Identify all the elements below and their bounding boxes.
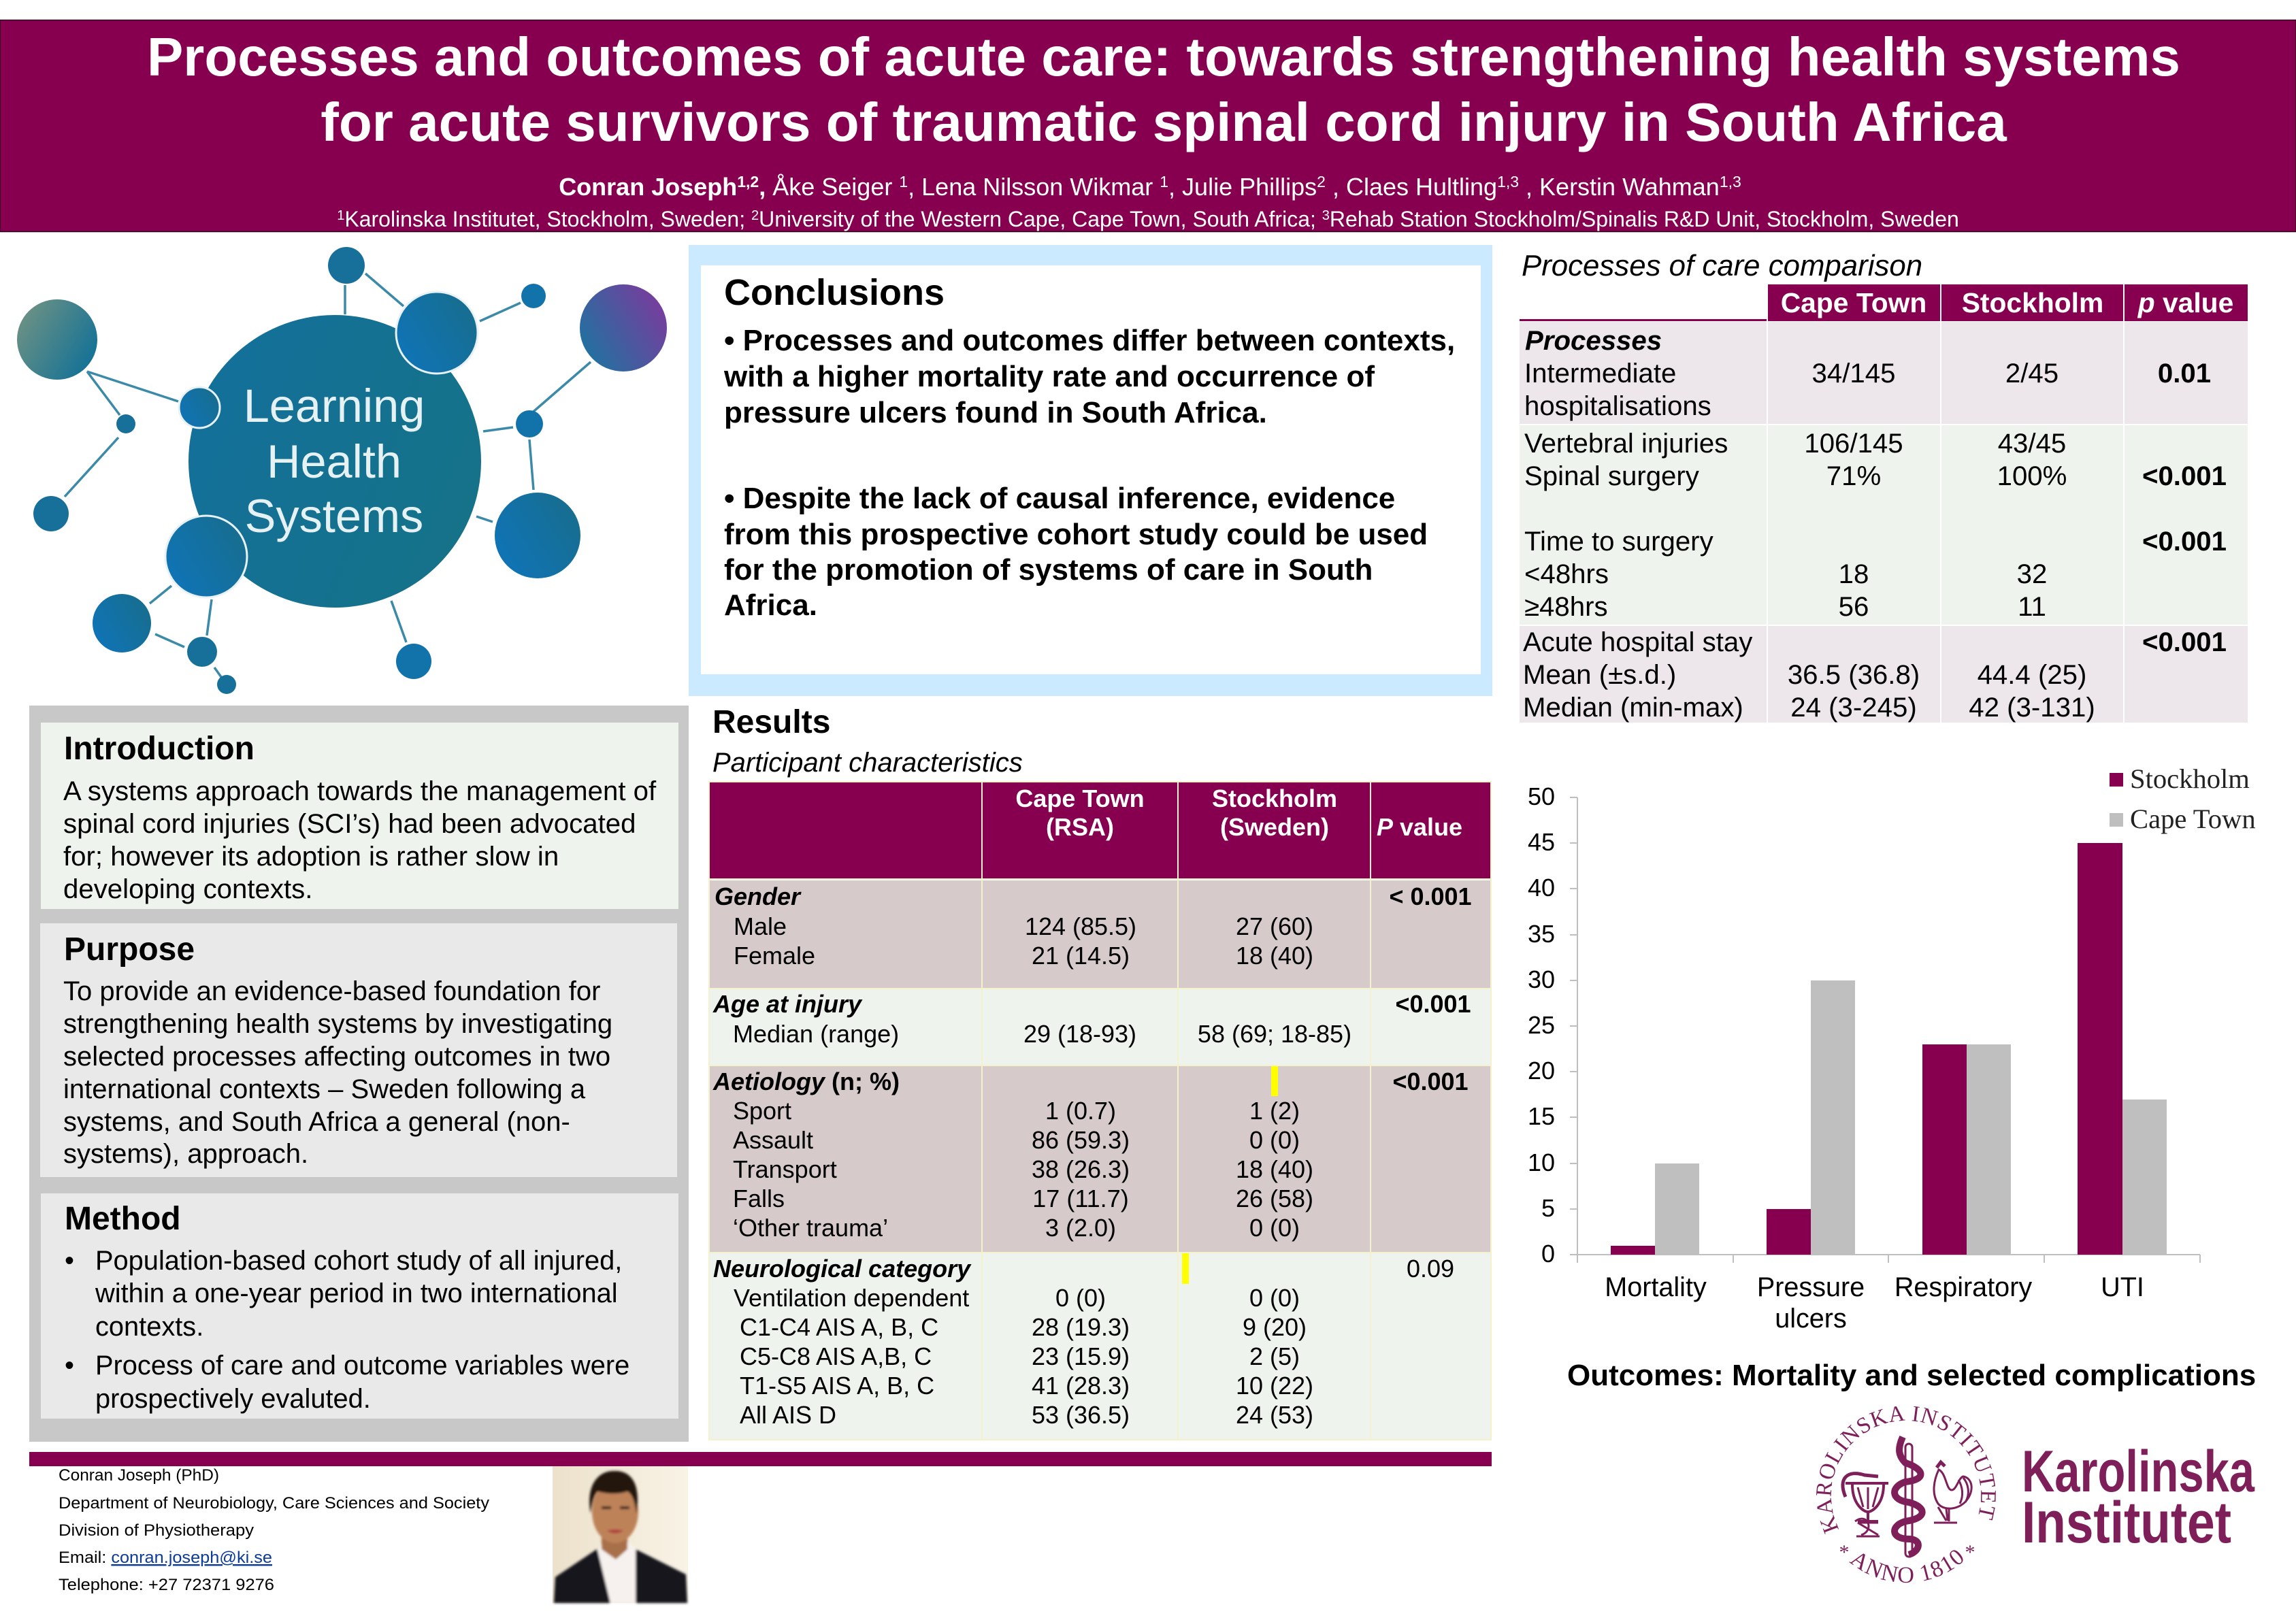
conclusions text: with a higher mortality rate and occurrence of bbox=[723, 360, 1375, 393]
panel: purpose: international contexts – Sweden following a bbox=[63, 1074, 586, 1104]
panel: purpose: systems, and South Africa a general (non- bbox=[63, 1107, 570, 1137]
conclusions text: • Despite the lack of causal inference, evidence bbox=[724, 482, 1395, 515]
surgery rows: 71% bbox=[1826, 461, 1881, 491]
table: processes of care bbox=[1520, 284, 2248, 723]
aetiology rows: Assault bbox=[733, 1126, 813, 1154]
y-axis labels: 35 bbox=[1528, 920, 1555, 948]
panel: introduction: A systems approach towards the management of bbox=[63, 776, 657, 806]
panel: introduction: developing contexts. bbox=[63, 874, 312, 904]
bars: UTI bbox=[2078, 843, 2167, 1255]
seal: KAROLINSKA INSTITUTET bbox=[1816, 1406, 1996, 1534]
panel: introduction: spinal cord injuries (SCI’s) had been advocated bbox=[63, 808, 636, 839]
authors: 1,3 bbox=[1497, 173, 1519, 191]
title bbox=[147, 27, 2180, 152]
panel: method bbox=[41, 1193, 678, 1419]
aetiology rows: 26 (58) bbox=[1236, 1185, 1313, 1212]
conclusions text: pressure ulcers found in South Africa. bbox=[724, 396, 1267, 429]
panel: purpose bbox=[40, 923, 677, 1177]
panel: introduction: Introduction bbox=[64, 731, 255, 767]
aetiology rows: 38 (26.3) bbox=[1032, 1155, 1130, 1183]
affiliations: Karolinska Institutet, Stockholm, Sweden; bbox=[344, 207, 751, 231]
y-axis labels: 45 bbox=[1528, 828, 1555, 856]
surgery rows: 56 bbox=[1839, 591, 1869, 622]
processes rows bbox=[1524, 325, 2211, 421]
table header bbox=[1015, 784, 1462, 841]
surgery rows: <48hrs bbox=[1524, 559, 1609, 589]
neurological rows: 53 (36.5) bbox=[1032, 1401, 1130, 1429]
surgery rows: Time to surgery bbox=[1524, 526, 1714, 557]
hospital stay rows: 36.5 (36.8) bbox=[1788, 659, 1920, 690]
aetiology rows: 1 (2) bbox=[1249, 1097, 1300, 1125]
panel: method: • bbox=[65, 1351, 74, 1381]
table header: Cape Town bbox=[1781, 287, 1926, 318]
panel: purpose: strengthening health systems by investigating bbox=[63, 1009, 612, 1039]
neurological rows bbox=[713, 1255, 1454, 1429]
panel: conclusions bbox=[689, 245, 1492, 696]
footer bar bbox=[29, 1452, 1492, 1466]
category labels: Mortality bbox=[1605, 1272, 1707, 1302]
bars: respiratory bbox=[1922, 1044, 2011, 1255]
y-axis labels: 20 bbox=[1528, 1057, 1555, 1085]
age rows: <0.001 bbox=[1395, 990, 1471, 1018]
surgery rows: 100% bbox=[1997, 461, 2067, 491]
y-axis labels: 10 bbox=[1528, 1148, 1555, 1176]
age rows: 58 (69; 18-85) bbox=[1198, 1020, 1351, 1048]
chart axes bbox=[1570, 797, 2200, 1263]
surgery rows: 106/145 bbox=[1804, 428, 1903, 459]
neurological rows: C5-C8 AIS A,B, C bbox=[740, 1342, 932, 1370]
gender rows: Gender bbox=[715, 882, 802, 910]
hospital stay rows: 42 (3-131) bbox=[1969, 692, 2095, 723]
surgery rows: 11 bbox=[2018, 591, 2046, 622]
conclusions text: from this prospective cohort study could be used bbox=[724, 518, 1428, 551]
table header: Stockholm bbox=[1962, 287, 2103, 318]
panel: purpose: Purpose bbox=[64, 931, 195, 968]
panel: method: prospectively evaluted. bbox=[95, 1384, 371, 1414]
chart title: Outcomes: Mortality and selected complications bbox=[1567, 1359, 2256, 1392]
big circle bbox=[188, 315, 481, 608]
panel: method: contexts. bbox=[95, 1312, 203, 1342]
panel: purpose: systems), approach. bbox=[63, 1139, 308, 1169]
aetiology rows: 1 (0.7) bbox=[1045, 1097, 1116, 1125]
gender rows: 18 (40) bbox=[1236, 942, 1313, 970]
authors: 2 bbox=[1317, 173, 1326, 191]
seal: * bbox=[1965, 1541, 1975, 1564]
surgery rows: <0.001 bbox=[2142, 461, 2227, 491]
aetiology rows: Transport bbox=[733, 1155, 837, 1183]
conclusions text: Africa. bbox=[724, 589, 817, 622]
authors: , Julie Phillips bbox=[1168, 173, 1317, 201]
legend: Cape Town bbox=[2130, 804, 2256, 834]
hospital stay rows: <0.001 bbox=[2142, 627, 2227, 657]
hospital stay rows: Acute hospital stay bbox=[1523, 627, 1753, 657]
hospital stay rows bbox=[1523, 627, 2227, 723]
icon: chalice bbox=[1843, 1474, 1888, 1536]
table header: Cape Town bbox=[1015, 784, 1145, 812]
graphic label: Learning bbox=[244, 380, 425, 432]
y-axis labels: 50 bbox=[1528, 782, 1555, 810]
processes rows: 2/45 bbox=[2005, 358, 2059, 389]
age rows: Age at injury bbox=[712, 990, 863, 1018]
graphic label: Health bbox=[267, 435, 401, 488]
aetiology rows: 86 (59.3) bbox=[1032, 1126, 1130, 1154]
y-axis labels: 15 bbox=[1528, 1102, 1555, 1130]
contact details: Email: conran.joseph@ki.se bbox=[59, 1549, 272, 1567]
category labels bbox=[1605, 1272, 2144, 1334]
surgery rows: Spinal surgery bbox=[1524, 461, 1700, 491]
conclusions text bbox=[723, 324, 1455, 622]
conclusions text: for the promotion of systems of care in South bbox=[724, 553, 1373, 586]
authors: , Kerstin Wahman bbox=[1519, 173, 1720, 201]
table header: (RSA) bbox=[1046, 813, 1114, 841]
hospital stay rows: 44.4 (25) bbox=[1978, 659, 2086, 690]
hospital stay rows: Median (min-max) bbox=[1523, 692, 1743, 723]
panel: introduction: for; however its adoption is rather slow in bbox=[63, 841, 559, 872]
gender rows: 21 (14.5) bbox=[1032, 942, 1130, 970]
contact details: Department of Neurobiology, Care Sciences and Society bbox=[59, 1494, 489, 1512]
panel: method: Process of care and outcome variables were bbox=[95, 1351, 629, 1381]
legend: Stockholm bbox=[2130, 763, 2250, 794]
hospital stay rows: Mean (±s.d.) bbox=[1523, 659, 1676, 690]
panel: purpose: selected processes affecting outcomes in two bbox=[63, 1042, 610, 1072]
graphic label: Systems bbox=[245, 490, 423, 542]
affiliations: 2 bbox=[751, 208, 759, 223]
table header bbox=[1781, 287, 2233, 318]
aetiology rows: 0 (0) bbox=[1249, 1214, 1300, 1242]
wordmark bbox=[2022, 1439, 2255, 1555]
neurological rows: C1-C4 AIS A, B, C bbox=[740, 1313, 938, 1341]
graphic label bbox=[244, 380, 425, 542]
y-axis labels: 0 bbox=[1541, 1240, 1555, 1268]
contact details bbox=[59, 1466, 489, 1594]
aetiology rows: Sport bbox=[733, 1097, 791, 1125]
contact details: Conran Joseph (PhD) bbox=[59, 1466, 219, 1485]
surgery rows: <0.001 bbox=[2142, 526, 2227, 557]
gender rows: 124 (85.5) bbox=[1025, 912, 1136, 940]
aetiology rows: 3 (2.0) bbox=[1045, 1214, 1116, 1242]
neurological rows: 2 (5) bbox=[1249, 1342, 1300, 1370]
logo: Karolinska Institutet bbox=[1816, 1406, 2255, 1583]
neurological rows: 9 (20) bbox=[1243, 1313, 1307, 1341]
authors: Åke Seiger bbox=[772, 173, 892, 201]
conclusions text: • Processes and outcomes differ between contexts, bbox=[724, 324, 1455, 357]
neurological rows: 28 (19.3) bbox=[1032, 1313, 1130, 1341]
panel: purpose: To provide an evidence-based foundation for bbox=[63, 976, 600, 1006]
neurological rows: Ventilation dependent bbox=[734, 1284, 969, 1312]
legend bbox=[2110, 763, 2256, 834]
panel: method: • bbox=[65, 1246, 74, 1276]
age rows bbox=[712, 990, 1471, 1048]
authors: , Lena Nilsson Wikmar bbox=[908, 173, 1160, 201]
aetiology rows: Aetiology (n; %) bbox=[712, 1068, 900, 1095]
processes rows: 34/145 bbox=[1812, 358, 1895, 389]
graphic: learning health systems network bbox=[17, 247, 667, 694]
category labels: UTI bbox=[2101, 1272, 2144, 1302]
gender rows bbox=[715, 882, 1472, 970]
heading: results: Results bbox=[712, 704, 830, 740]
seal: ANNO 1810 bbox=[1849, 1550, 1963, 1583]
neurological rows: 23 (15.9) bbox=[1032, 1342, 1130, 1370]
authors: , Claes Hultling bbox=[1326, 173, 1497, 201]
neurological rows: 24 (53) bbox=[1236, 1401, 1313, 1429]
table header: p value bbox=[2137, 287, 2233, 318]
y-axis labels bbox=[1528, 782, 1555, 1268]
authors: Conran Joseph bbox=[559, 173, 737, 201]
aetiology rows: ‘Other trauma’ bbox=[733, 1214, 888, 1242]
y-axis labels: 40 bbox=[1528, 874, 1555, 902]
surgery rows: Vertebral injuries bbox=[1524, 428, 1728, 459]
authors: , bbox=[759, 173, 766, 201]
category labels: Respiratory bbox=[1895, 1272, 2032, 1302]
bars: mortality bbox=[1611, 1163, 1699, 1255]
y-axis labels: 5 bbox=[1541, 1194, 1555, 1222]
wordmark: Institutet bbox=[2022, 1490, 2231, 1555]
seal: * bbox=[1839, 1541, 1850, 1564]
processes rows: Processes bbox=[1525, 325, 1662, 356]
title: Processes and outcomes of acute care: towards strengthening health systems bbox=[147, 27, 2180, 87]
gender rows: Female bbox=[734, 942, 815, 970]
authors: 1 bbox=[899, 173, 908, 191]
y-axis labels: 30 bbox=[1528, 965, 1555, 993]
neurological rows: T1-S5 AIS A, B, C bbox=[740, 1372, 934, 1400]
table header: Stockholm bbox=[1212, 784, 1337, 812]
neurological rows: All AIS D bbox=[740, 1401, 836, 1429]
panel: left column background bbox=[29, 706, 689, 1442]
surgery rows: 32 bbox=[2017, 559, 2047, 589]
panel: method: Population-based cohort study of all injured, bbox=[95, 1246, 622, 1276]
authors: 1,2 bbox=[737, 173, 759, 191]
age rows: Median (range) bbox=[733, 1020, 899, 1048]
surgery rows: ≥48hrs bbox=[1524, 591, 1608, 622]
panel: method: Method bbox=[65, 1201, 181, 1237]
surgery rows bbox=[1524, 428, 2227, 622]
authors: 1,3 bbox=[1720, 173, 1741, 191]
aetiology rows: 17 (11.7) bbox=[1032, 1185, 1129, 1212]
header banner bbox=[0, 20, 2296, 231]
neurological rows: 0 (0) bbox=[1249, 1284, 1300, 1312]
neurological rows: 0 (0) bbox=[1055, 1284, 1106, 1312]
processes rows: hospitalisations bbox=[1524, 391, 1711, 421]
conclusions heading: Conclusions bbox=[724, 272, 945, 313]
aetiology rows: 18 (40) bbox=[1236, 1155, 1313, 1183]
authors: 1 bbox=[1160, 173, 1168, 191]
title: for acute survivors of traumatic spinal cord injury in South Africa bbox=[321, 92, 2007, 152]
surgery rows: 43/45 bbox=[1998, 428, 2066, 459]
aetiology rows bbox=[712, 1068, 1469, 1242]
aetiology rows: Falls bbox=[733, 1185, 785, 1212]
neurological rows: 41 (28.3) bbox=[1032, 1372, 1130, 1400]
bar chart: outcomes bbox=[1528, 763, 2256, 1334]
affiliations: Rehab Station Stockholm/Spinalis R&D Unit, Stockholm, Sweden bbox=[1330, 207, 1959, 231]
table: participant characteristics bbox=[709, 782, 1491, 1440]
aetiology rows: 0 (0) bbox=[1249, 1126, 1300, 1154]
category labels: Pressure bbox=[1757, 1272, 1865, 1302]
panel: introduction bbox=[41, 723, 678, 909]
icon: rod and serpent bbox=[1895, 1437, 1922, 1557]
bars: pressure ulcers bbox=[1767, 980, 1855, 1255]
subheading: processes of care comparison: Processes of care comparison bbox=[1522, 249, 1922, 282]
contact details: Division of Physiotherapy bbox=[59, 1521, 254, 1540]
affiliations: University of the Western Cape, Cape Town, South Africa; bbox=[759, 207, 1322, 231]
subheading: participant characteristics: Participant characteristics bbox=[712, 748, 1023, 778]
table header: P value bbox=[1377, 813, 1462, 841]
category labels: ulcers bbox=[1775, 1304, 1847, 1334]
table header: (Sweden) bbox=[1220, 813, 1329, 841]
hospital stay rows: 24 (3-245) bbox=[1790, 692, 1917, 723]
icon: rooster bbox=[1934, 1462, 1971, 1523]
gender rows: 27 (60) bbox=[1236, 912, 1313, 940]
neurological rows: 0.09 bbox=[1407, 1255, 1454, 1283]
seal bbox=[1816, 1406, 1996, 1583]
affiliations: 3 bbox=[1322, 208, 1330, 223]
contact details: Telephone: +27 72371 9276 bbox=[59, 1576, 274, 1594]
y-axis labels: 25 bbox=[1528, 1011, 1555, 1039]
gender rows: < 0.001 bbox=[1389, 882, 1472, 910]
gender rows: Male bbox=[734, 912, 787, 940]
aetiology rows: <0.001 bbox=[1392, 1068, 1469, 1095]
neurological rows: Neurological category bbox=[713, 1255, 972, 1283]
age rows: 29 (18-93) bbox=[1023, 1020, 1136, 1048]
surgery rows: 18 bbox=[1839, 559, 1869, 589]
panel: method: within a one-year period in two international bbox=[95, 1278, 618, 1308]
processes rows: Intermediate bbox=[1524, 358, 1676, 389]
neurological rows: 10 (22) bbox=[1236, 1372, 1313, 1400]
affiliations: 1 bbox=[337, 208, 344, 223]
processes rows: 0.01 bbox=[2158, 358, 2211, 389]
photo: author portrait bbox=[553, 1466, 688, 1603]
